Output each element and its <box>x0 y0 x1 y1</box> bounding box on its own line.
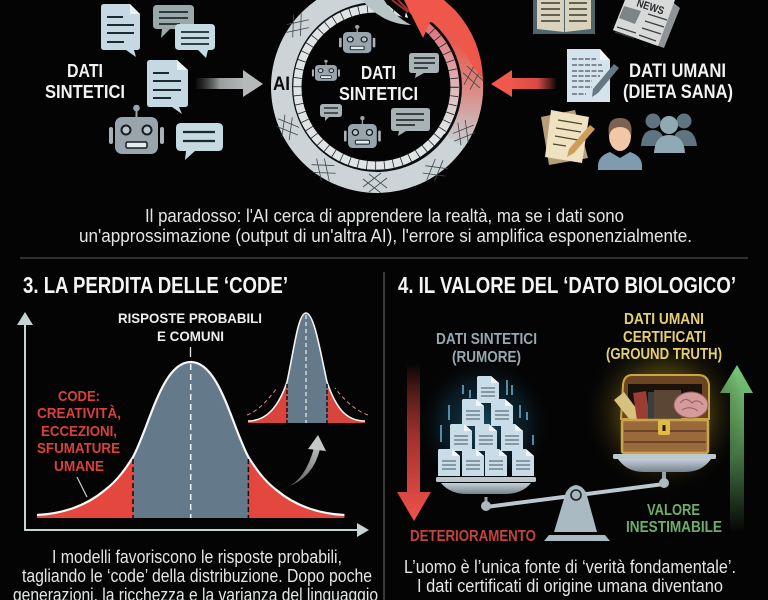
right tail <box>248 457 344 518</box>
text block: tails explanation: I modelli favoriscono le risposte probabili, <box>52 547 342 567</box>
label: dati sintetici rumore: DATI SINTETICI <box>436 331 537 348</box>
arrow: red feedback loop <box>404 0 483 80</box>
glow: synthetic pile <box>416 357 552 493</box>
label: dati sintetici centre: SINTETICI <box>339 84 418 104</box>
panel: synthetic data sources <box>45 4 223 160</box>
label: dati sintetici rumore <box>436 331 537 366</box>
icon: grey speech bubble <box>153 5 194 38</box>
icon: scale beam and fulcrum <box>481 478 669 541</box>
text block: tails explanation: tagliando le ‘code’ della distribuzione. Dopo poche <box>22 566 372 586</box>
curve outline <box>37 362 344 515</box>
text block: paradox <box>79 206 692 246</box>
label: code: CODE: <box>58 388 100 405</box>
icon: document pile <box>438 376 534 476</box>
icon: robot left <box>109 105 164 154</box>
arrow: deterioration <box>397 363 431 521</box>
axes <box>17 312 369 537</box>
panel: ring interior <box>312 25 439 148</box>
label: dati umani certificati: DATI UMANI <box>624 311 704 328</box>
arrow: value <box>720 365 753 532</box>
icon: newspaper <box>613 0 680 48</box>
arrow: human data into ring <box>491 70 557 97</box>
icon: open book <box>533 0 595 34</box>
icon: bubble lower left <box>320 104 342 121</box>
label: dati sintetici: SINTETICI <box>45 82 125 102</box>
icon: document top <box>101 4 140 57</box>
icon: left scale plate <box>436 477 536 494</box>
label: dati sintetici centre <box>339 63 418 104</box>
text block: tails explanation <box>13 547 378 600</box>
label: valore inestimabile: INESTIMABILE <box>626 519 722 536</box>
icon: snake head <box>362 0 432 32</box>
label: code: UMANE <box>54 458 104 475</box>
icon: bubble upper right <box>409 53 439 78</box>
heading: section 3: 3. LA PERDITA DELLE ‘CODE’ <box>23 272 288 298</box>
icon: robot middle <box>312 60 340 81</box>
text block: biological value: I dati certificati di origine umana diventano <box>417 576 723 596</box>
label: dati umani: DATI UMANI <box>629 61 726 82</box>
icon: noise streaks <box>441 380 533 445</box>
label: dati sintetici: DATI <box>67 61 103 81</box>
glow: treasure <box>582 331 746 495</box>
label: code: CREATIVITÀ, <box>37 405 121 422</box>
arrow: curve narrowing <box>287 435 326 487</box>
panel: biological data scale <box>397 311 753 545</box>
label: risposte probabili: E COMUNI <box>157 328 224 344</box>
label: dati umani certificati: CERTIFICATI <box>623 329 706 346</box>
icon: bubble lower right <box>391 108 430 136</box>
label: dati umani <box>623 61 733 103</box>
icon: robot top <box>339 25 375 53</box>
icon: handwritten document with pen <box>567 49 619 102</box>
label: risposte probabili <box>118 310 262 344</box>
label: valore inestimabile <box>626 502 722 536</box>
label: dati umani certificati: (GROUND TRUTH) <box>606 346 722 363</box>
icon: document middle <box>147 60 188 114</box>
chart: bell curve with tails <box>17 310 369 537</box>
text block: paradox: Il paradosso: l'AI cerca di apprendere la realtà, ma se i dati sono <box>145 206 624 226</box>
label: code <box>37 388 121 475</box>
label: risposte probabili: RISPOSTE PROBABILI <box>118 310 262 326</box>
icon: group of people <box>641 114 697 153</box>
label: dati sintetici centre: DATI <box>361 63 396 83</box>
icon: papers with pencil <box>541 110 595 165</box>
icon: speech bubble bottom <box>176 123 223 160</box>
text block: biological value <box>404 557 736 596</box>
panel: human data sources <box>533 0 733 170</box>
small narrowed bell curve <box>247 313 368 423</box>
label: AI: AI <box>273 74 290 95</box>
icon: ouroboros snake ring <box>273 0 485 193</box>
icon: light speech bubble <box>175 24 215 58</box>
text block: biological value: L’uomo è l’unica fonte di ‘verità fondamentale’. <box>404 557 736 577</box>
label: dati umani certificati <box>606 311 722 363</box>
arrow: synthetic data into ring <box>196 70 263 97</box>
icon: right scale plate <box>613 454 716 480</box>
label: deterioramento: DETERIORAMENTO <box>410 528 536 545</box>
label: valore inestimabile: VALORE <box>647 502 700 519</box>
label: dati sintetici rumore: (RUMORE) <box>452 349 521 366</box>
label: dati sintetici <box>45 61 125 102</box>
left tail <box>37 457 133 518</box>
icon: person <box>598 118 642 170</box>
icon: treasure chest <box>614 375 709 453</box>
text block: paradox: un'approssimazione (output di un'altra AI), l'errore si amplifica esponenzialmente. <box>79 226 692 246</box>
label: code: ECCEZIONI, <box>41 423 117 440</box>
centre area <box>133 362 248 518</box>
label: dati umani: (DIETA SANA) <box>623 82 733 103</box>
icon: robot bottom <box>344 116 381 148</box>
label: code: SFUMATURE <box>37 440 120 457</box>
